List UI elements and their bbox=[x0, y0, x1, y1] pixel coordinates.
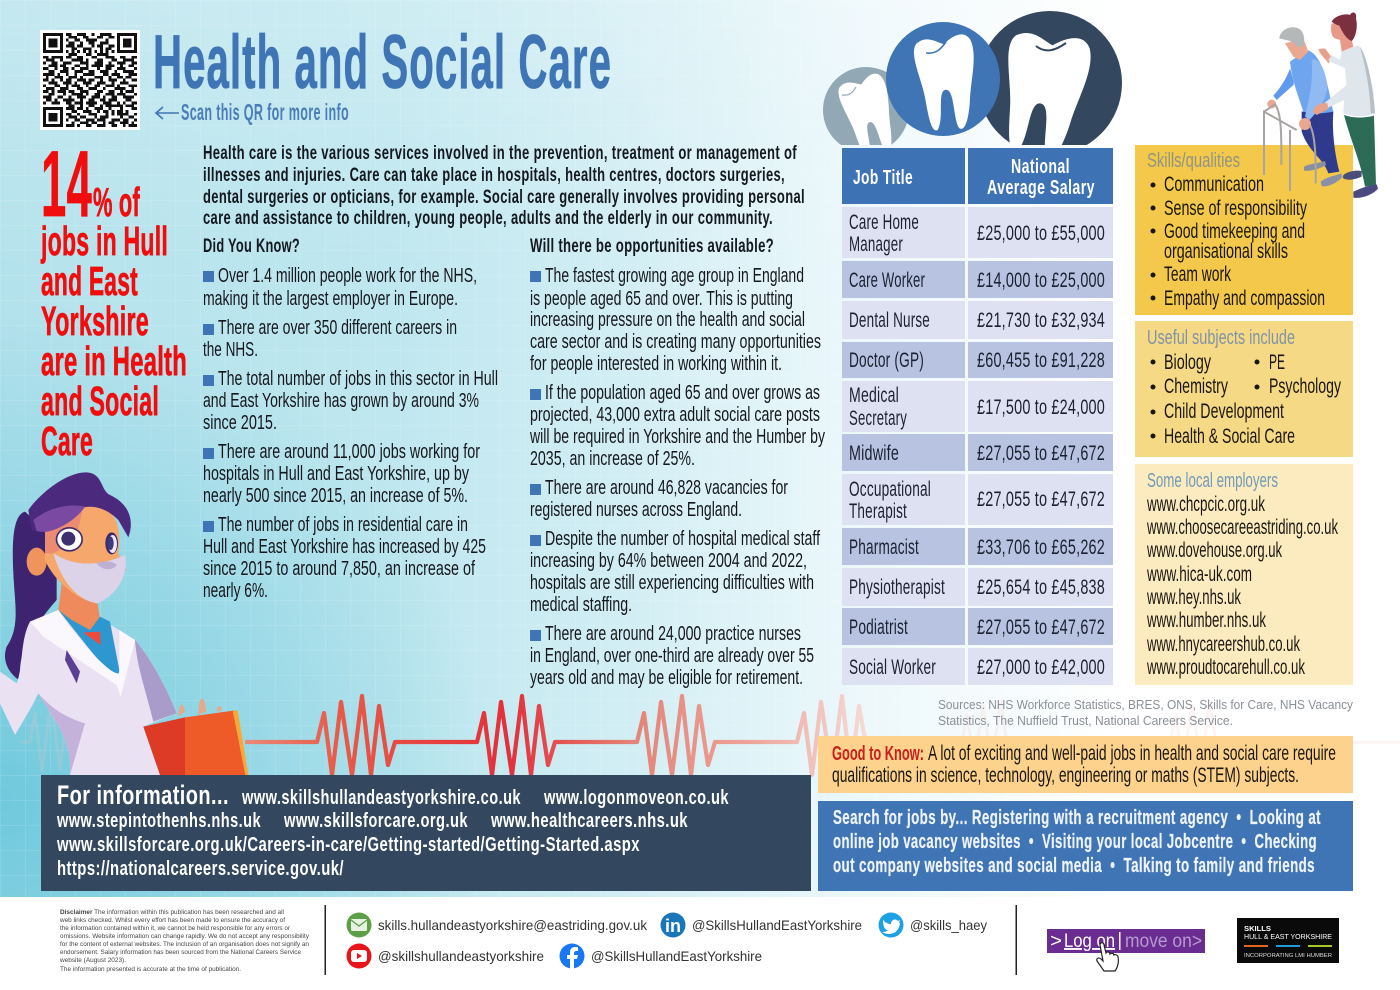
icon: medium blue tooth bbox=[886, 22, 1000, 136]
column: opportunities: Despite the number of hospital medical staff bbox=[545, 528, 820, 550]
job titles: Care Worker bbox=[849, 269, 925, 292]
disclaimer: for the content of external websites. The inclusion of an organisation does not signify an bbox=[60, 941, 309, 948]
carer trousers and shoes bbox=[1343, 115, 1378, 198]
headline statistic: 14% of jobs: 14 bbox=[41, 131, 92, 236]
title: Health and Social Care bbox=[153, 20, 612, 105]
panel: useful subjects bbox=[1135, 321, 1353, 457]
callout: good to know: Good to Know: bbox=[832, 743, 924, 765]
column: opportunities: will be required in Yorkshire and the Humber by bbox=[529, 426, 825, 448]
illustration: carer helping older person with walking frame bbox=[1264, 13, 1378, 198]
panel: local employers: www.hnycareershub.co.uk bbox=[1146, 633, 1300, 656]
column: did you know: the NHS. bbox=[203, 339, 258, 361]
column: opportunities: in England, over one-third are already over 55 bbox=[530, 645, 814, 667]
job titles bbox=[849, 211, 945, 679]
table header: Average Salary bbox=[987, 177, 1095, 199]
salaries: £17,500 to £24,000 bbox=[977, 396, 1105, 419]
table header: National bbox=[1011, 156, 1070, 178]
column: did you know: since 2015. bbox=[203, 412, 277, 434]
panel: for information links: www.skillsforcare.org.uk bbox=[283, 810, 468, 832]
job titles: Dental Nurse bbox=[849, 309, 930, 332]
intro paragraph: illnesses and injuries. Care can take place in hospitals, health centres, doctors surgeries, bbox=[203, 165, 785, 186]
column: did you know: There are over 350 different careers in bbox=[218, 317, 457, 339]
contact: youtube bbox=[346, 944, 544, 968]
contact: linkedin: in bbox=[665, 916, 681, 936]
panel: skills and qualities: Empathy and compassion bbox=[1164, 287, 1325, 310]
panel: skills and qualities: Skills/qualities bbox=[1147, 150, 1240, 172]
panel: for information links bbox=[41, 775, 811, 891]
salaries: £27,000 to £42,000 bbox=[977, 656, 1105, 679]
column: did you know: nearly 6%. bbox=[203, 580, 268, 602]
job titles: Therapist bbox=[849, 500, 907, 523]
salaries: £14,000 to £25,000 bbox=[977, 269, 1105, 292]
column: did you know: Did You Know? bbox=[203, 236, 300, 257]
job titles: Secretary bbox=[849, 407, 907, 430]
salaries: £27,055 to £47,672 bbox=[977, 442, 1105, 465]
tooth icons bbox=[823, 11, 1122, 145]
heartbeat line bbox=[20, 692, 1400, 775]
salaries: £60,455 to £91,228 bbox=[977, 349, 1105, 372]
table rows backgrounds bbox=[842, 207, 1113, 685]
column: opportunities: years old and may be eligible for retirement. bbox=[530, 667, 803, 689]
table header: Job Title bbox=[853, 167, 913, 189]
intro paragraph: Health care is the various services involved in the prevention, treatment or management of bbox=[203, 143, 797, 164]
headline statistic: 14% of jobs bbox=[40, 131, 187, 464]
column: opportunities: There are around 24,000 practice nurses bbox=[545, 623, 801, 645]
logo: log on move on: Log on bbox=[1064, 931, 1115, 952]
job titles: Midwife bbox=[849, 442, 899, 465]
panel: useful subjects: PE bbox=[1269, 351, 1285, 374]
salaries: £27,055 to £47,672 bbox=[977, 616, 1105, 639]
column: opportunities bbox=[529, 236, 825, 689]
contact: twitter: @skills_haey bbox=[910, 917, 987, 933]
icon: hand cursor bbox=[1097, 943, 1118, 971]
panel: local employers: www.dovehouse.org.uk bbox=[1146, 539, 1282, 562]
job titles: Care Home bbox=[849, 211, 919, 234]
panel: for information links: www.healthcareers.nhs.uk bbox=[490, 810, 688, 832]
contact: email bbox=[346, 912, 648, 938]
column: opportunities: medical staffing. bbox=[530, 594, 632, 616]
sources: Statistics, The Nuffield Trust, National Careers Service. bbox=[938, 714, 1233, 728]
salaries: £25,000 to £55,000 bbox=[977, 222, 1105, 245]
contact: linkedin bbox=[660, 912, 862, 938]
icon: large dark tooth bbox=[986, 11, 1122, 145]
column: opportunities: projected, 43,000 extra adult social care posts bbox=[530, 404, 820, 426]
panel: skills and qualities bbox=[1135, 145, 1353, 315]
panel: for information links: www.skillshullandeastyorkshire.co.uk bbox=[241, 787, 521, 809]
salaries: £25,654 to £45,838 bbox=[977, 576, 1105, 599]
intro paragraph: dental surgeries or opticians, for example. Social care generally involves providing personal bbox=[203, 187, 805, 208]
job titles: Medical bbox=[849, 384, 899, 407]
panel: search for jobs bbox=[818, 801, 1353, 891]
panel: local employers: Some local employers bbox=[1147, 470, 1278, 492]
column: opportunities: Will there be opportunities available? bbox=[530, 236, 774, 257]
column: did you know: and East Yorkshire has grown by around 3% bbox=[203, 390, 479, 412]
illustration: doctor with mask and folder bbox=[0, 472, 248, 775]
panel: skills and qualities: organisational skills bbox=[1164, 240, 1288, 263]
panel: skills and qualities: Team work bbox=[1164, 263, 1231, 286]
contact: linkedin: @SkillsHullandEastYorkshire bbox=[692, 917, 862, 933]
column: did you know: making it the largest employer in Europe. bbox=[203, 288, 458, 310]
contact: facebook: @SkillsHullandEastYorkshire bbox=[591, 948, 762, 964]
panel: useful subjects: Biology bbox=[1164, 351, 1211, 374]
column: did you know: hospitals in Hull and East Yorkshire, up by bbox=[203, 463, 469, 485]
panel: local employers: www.proudtocarehull.co.uk bbox=[1146, 656, 1305, 679]
column: opportunities: The fastest growing age group in England bbox=[545, 265, 804, 287]
job titles: Occupational bbox=[849, 478, 931, 501]
sources: Sources: NHS Workforce Statistics, BRES, ONS, Skills for Care, NHS Vacancy bbox=[938, 698, 1354, 712]
headline statistic: 14% of jobs: and East bbox=[41, 258, 138, 304]
table header bbox=[842, 148, 1113, 204]
older person bbox=[1267, 27, 1342, 186]
panel: useful subjects: Health & Social Care bbox=[1164, 425, 1295, 448]
column: opportunities: hospitals are still experiencing difficulties with bbox=[530, 572, 814, 594]
walking frame bbox=[1264, 104, 1316, 191]
panel: skills and qualities: Sense of responsibility bbox=[1164, 197, 1307, 220]
disclaimer: the information contained within it, we cannot be held responsible for any errors or bbox=[60, 925, 291, 932]
logo: log on move on: > bbox=[1050, 931, 1062, 952]
disclaimer: omissions. Website information can change rapidly. We do not accept any responsibility bbox=[60, 933, 310, 940]
logo: skills hull and east yorkshire bbox=[1237, 918, 1339, 963]
disclaimer bbox=[59, 909, 310, 973]
salaries: £21,730 to £32,934 bbox=[977, 309, 1105, 332]
panel: for information links: For information... bbox=[57, 780, 229, 810]
disclaimer: The information presented is accurate at the time of publication. bbox=[60, 966, 241, 973]
column: opportunities: increasing by 64% between 2004 and 2022, bbox=[530, 550, 807, 572]
column: opportunities: is people aged 65 and over. This is putting bbox=[530, 288, 793, 310]
column: opportunities: for people interested in working within it. bbox=[530, 353, 782, 375]
headline statistic: 14% of jobs: jobs in Hull bbox=[40, 218, 168, 264]
carer upper body bbox=[1313, 13, 1375, 116]
column: opportunities: There are around 46,828 vacancies for bbox=[545, 477, 788, 499]
panel: useful subjects: Chemistry bbox=[1164, 375, 1228, 398]
headline statistic: 14% of jobs: and Social bbox=[41, 378, 159, 424]
column: did you know: There are around 11,000 jobs working for bbox=[218, 441, 480, 463]
column: opportunities: registered nurses across England. bbox=[530, 499, 742, 521]
contact: facebook bbox=[560, 944, 762, 969]
headline statistic: 14% of jobs: % of bbox=[93, 179, 140, 225]
column: did you know: since 2015 to around 7,850, an increase of bbox=[203, 558, 475, 580]
disclaimer: web links checked. Whilst every effort has been made to ensure the accuracy of bbox=[59, 917, 285, 924]
job titles: Doctor (GP) bbox=[849, 349, 924, 372]
headline statistic: 14% of jobs: Yorkshire bbox=[41, 298, 149, 344]
salaries: £27,055 to £47,672 bbox=[977, 488, 1105, 511]
panel: local employers: www.hica-uk.com bbox=[1146, 563, 1252, 586]
column: opportunities: increasing pressure on the health and social bbox=[530, 309, 805, 331]
salaries bbox=[977, 222, 1105, 679]
disclaimer: Disclaimer The information within this publication has been researched and all bbox=[60, 909, 285, 916]
column: opportunities: 2035, an increase of 25%. bbox=[530, 448, 695, 470]
intro paragraph bbox=[203, 143, 805, 229]
disclaimer: endorsement. Salary information has been sourced from the National Careers Service bbox=[60, 949, 301, 956]
footer dividers bbox=[324, 905, 1017, 975]
panel: useful subjects: Psychology bbox=[1269, 375, 1341, 398]
column: opportunities: If the population aged 65 and over grows as bbox=[545, 382, 820, 404]
logo: skills hull and east yorkshire: INCORPORATING LMI HUMBER bbox=[1244, 953, 1332, 959]
logo: log on move on bbox=[1047, 929, 1205, 971]
column: did you know: Hull and East Yorkshire has increased by 425 bbox=[203, 536, 486, 558]
panel: skills and qualities: Communication bbox=[1164, 173, 1264, 196]
job titles: Manager bbox=[849, 233, 903, 256]
icon: small grey tooth bbox=[823, 67, 907, 145]
scan QR note with arrow bbox=[156, 99, 349, 125]
sources bbox=[938, 698, 1354, 728]
panel: useful subjects: Useful subjects include bbox=[1147, 327, 1295, 349]
contact: email: skills.hullandeastyorkshire@eastriding.gov.uk bbox=[378, 917, 648, 933]
panel: local employers: www.hey.nhs.uk bbox=[1146, 586, 1241, 609]
panel: useful subjects: Child Development bbox=[1164, 400, 1284, 423]
column: opportunities: care sector and is creating many opportunities bbox=[530, 331, 821, 353]
panel: for information links: www.skillsforcare.org.uk/Careers-in-care/Getting-started/Getting-Started.aspx bbox=[56, 834, 640, 856]
column: did you know: The number of jobs in residential care in bbox=[218, 514, 468, 536]
scan QR note with arrow: Scan this QR for more info bbox=[181, 99, 349, 125]
panel: local employers: www.chcpcic.org.uk bbox=[1146, 493, 1265, 516]
job titles: Social Worker bbox=[849, 656, 936, 679]
panel: for information links: www.stepintothenhs.nhs.uk bbox=[56, 810, 261, 832]
disclaimer: website (August 2023). bbox=[59, 957, 126, 964]
logo: skills hull and east yorkshire: HULL & EAST YORKSHIRE bbox=[1244, 934, 1332, 941]
headline statistic: 14% of jobs: are in Health bbox=[41, 338, 187, 384]
intro paragraph: care and assistance to children, young people, adults and the elderly in our community. bbox=[203, 208, 773, 229]
panel: local employers: www.humber.nhs.uk bbox=[1146, 609, 1266, 632]
job titles: Physiotherapist bbox=[849, 576, 945, 599]
column: did you know: The total number of jobs in this sector in Hull bbox=[218, 368, 498, 390]
job titles: Pharmacist bbox=[849, 536, 919, 559]
panel: local employers bbox=[1135, 464, 1353, 685]
logo: log on move on: move on> bbox=[1125, 931, 1202, 952]
logo: skills hull and east yorkshire: SKILLS bbox=[1244, 926, 1271, 933]
callout: good to know bbox=[818, 736, 1353, 793]
QR code bbox=[40, 30, 140, 130]
panel: for information links: www.logonmoveon.co.uk bbox=[543, 787, 729, 809]
column: did you know bbox=[203, 236, 498, 602]
column: did you know: nearly 500 since 2015, an increase of 5%. bbox=[203, 485, 468, 507]
panel: skills and qualities: Good timekeeping and bbox=[1164, 220, 1305, 243]
job titles: Podiatrist bbox=[849, 616, 908, 639]
salary table bbox=[842, 148, 1113, 685]
contact: twitter bbox=[878, 912, 987, 938]
panel: for information links: https://nationalcareers.service.gov.uk/ bbox=[57, 858, 344, 880]
salaries: £33,706 to £65,262 bbox=[977, 536, 1105, 559]
column: did you know: Over 1.4 million people work for the NHS, bbox=[218, 265, 477, 287]
contact: youtube: @skillshullandeastyorkshire bbox=[378, 948, 544, 964]
headline statistic: 14% of jobs: Care bbox=[41, 418, 93, 464]
